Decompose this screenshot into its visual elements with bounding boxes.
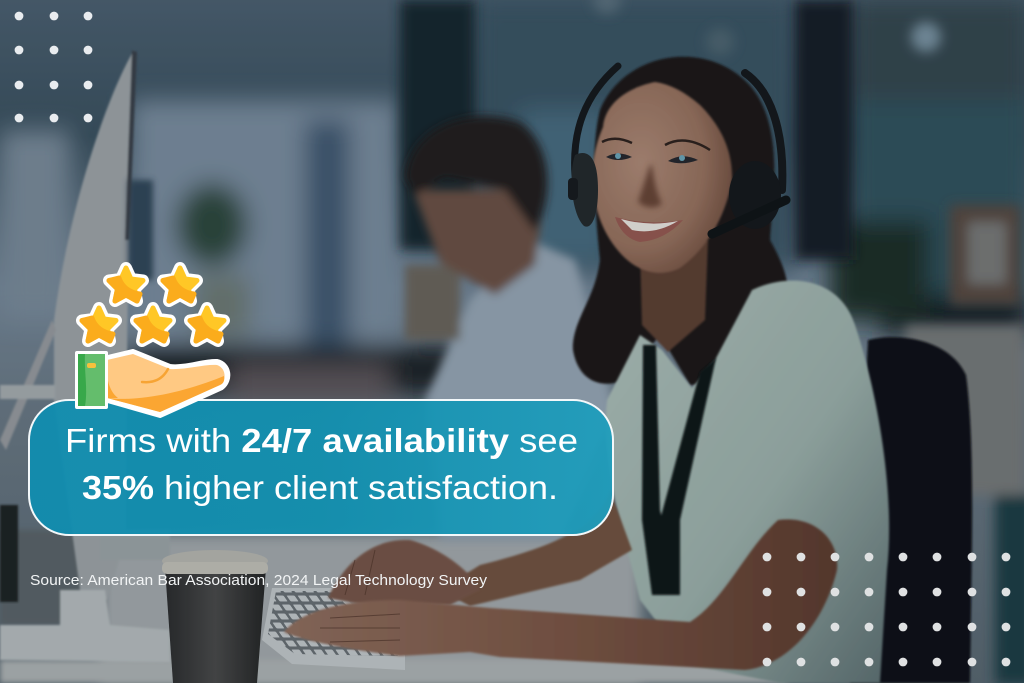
neck bbox=[640, 240, 708, 352]
face bbox=[592, 82, 732, 273]
callout text bbox=[65, 423, 578, 507]
background colleague bbox=[405, 116, 615, 540]
icon: green cuff bbox=[75, 351, 108, 409]
decorative dots: top left bbox=[15, 12, 92, 122]
woman's hair back bbox=[573, 57, 788, 385]
source line: Source: American Bar Association, 2024 Legal Technology Survey bbox=[30, 572, 488, 589]
facial features bbox=[602, 139, 710, 242]
icon: hand bbox=[104, 351, 228, 416]
decorative dots: bottom right bbox=[763, 553, 1010, 666]
shirt bbox=[606, 281, 889, 683]
coffee cup bbox=[162, 550, 268, 683]
monitor bbox=[0, 50, 170, 662]
icon: hand holding five stars bbox=[75, 268, 228, 416]
keyboard bbox=[262, 588, 405, 670]
woman's far arm and hands bbox=[284, 490, 837, 670]
callout text: 35% higher client satisfaction. bbox=[82, 470, 558, 507]
callout text: Firms with 24/7 availability see bbox=[65, 423, 578, 460]
lanyard bbox=[642, 345, 716, 595]
headband left bbox=[575, 66, 618, 175]
callout banner bbox=[29, 400, 613, 535]
desk bbox=[0, 530, 790, 683]
headset bbox=[568, 73, 786, 234]
chair bbox=[850, 337, 972, 683]
icon: stars bbox=[82, 268, 224, 341]
